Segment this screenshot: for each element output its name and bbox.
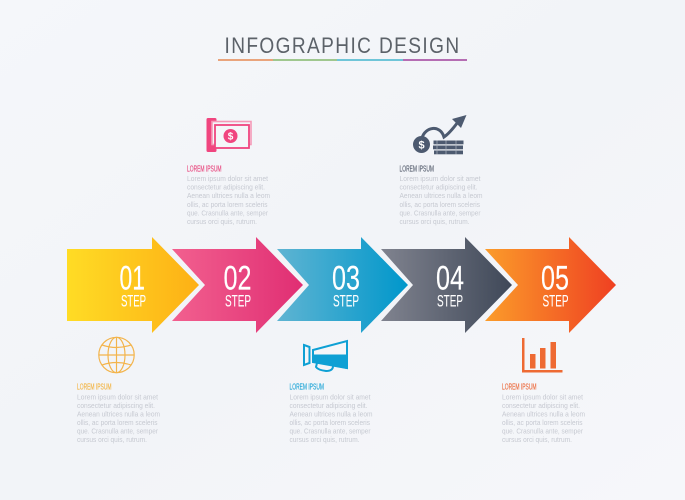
text block: step 04: que. Crasnulla ante, semper	[400, 208, 481, 217]
arrow step 05: STEP	[542, 292, 568, 310]
arrow step 04	[381, 237, 512, 333]
icon: coin with rising arrow and stacks	[413, 115, 466, 154]
text block: step 01: ollis, ac porta lorem sceleris	[77, 418, 158, 427]
text block: step 02: cursus orci quis, rutrum.	[187, 217, 257, 226]
text block: step 05: Aenean ultrices nulla a leom	[502, 410, 585, 418]
icon: banknotes	[206, 118, 251, 152]
text block: step 04: LOREM IPSUM	[400, 164, 434, 174]
text block: step 05: que. Crasnulla ante, semper	[502, 426, 583, 436]
text block: step 01: consectetur adipiscing elit.	[77, 401, 155, 410]
text block: step 05	[502, 382, 585, 444]
arrow step 02: 02	[224, 260, 252, 298]
icon: bar chart	[522, 338, 562, 372]
text block: step 03: Lorem ipsum dolor sit amet	[290, 392, 371, 402]
text block: step 04: ollis, ac porta lorem sceleris	[400, 200, 480, 209]
text block: step 01: que. Crasnulla ante, semper	[77, 426, 158, 436]
text block: step 02: ollis, ac porta lorem sceleris	[187, 200, 268, 209]
text block: step 01: Aenean ultrices nulla a leom	[77, 410, 160, 418]
arrow step 01: STEP	[121, 292, 146, 310]
arrow step 04: STEP	[437, 292, 463, 310]
text block: step 04	[400, 164, 482, 226]
text block: step 03: consectetur adipiscing elit.	[290, 401, 368, 410]
text block: step 03	[290, 382, 372, 444]
arrow step 03: STEP	[333, 292, 359, 310]
text block: step 03: cursus orci quis, rutrum.	[290, 435, 360, 444]
arrow step 04: 04	[436, 260, 464, 298]
text block: step 04: cursus orci quis, rutrum.	[400, 217, 470, 226]
text block: step 04: Lorem ipsum dolor sit amet	[400, 174, 481, 183]
text block: step 04: Aenean ultrices nulla a leom	[400, 191, 482, 200]
text block: step 01: cursus orci quis, rutrum.	[77, 435, 147, 444]
arrow step 01	[67, 237, 199, 333]
text block: step 04: consectetur adipiscing elit.	[400, 183, 478, 192]
text block: step 02	[187, 164, 270, 226]
text block: step 01: Lorem ipsum dolor sit amet	[77, 392, 159, 402]
icon: megaphone	[304, 341, 347, 371]
text block: step 03: ollis, ac porta lorem sceleris	[290, 418, 370, 427]
text block: step 02: que. Crasnulla ante, semper	[187, 208, 268, 217]
text block: step 03: que. Crasnulla ante, semper	[290, 426, 371, 436]
arrow step 02	[172, 237, 303, 333]
icon: banknotes: $	[228, 132, 234, 142]
arrow step 01: 01	[120, 260, 145, 298]
text block: step 05: consectetur adipiscing elit.	[502, 401, 580, 410]
text block: step 05: cursus orci quis, rutrum.	[502, 435, 572, 444]
text block: step 02: consectetur adipiscing elit.	[187, 183, 265, 192]
icon: coin with rising arrow and stacks: $	[418, 140, 425, 152]
arrow step 02: STEP	[225, 292, 251, 310]
text block: step 01: LOREM IPSUM	[77, 382, 112, 392]
text block: step 05: Lorem ipsum dolor sit amet	[502, 392, 584, 402]
arrow step 03: 03	[332, 260, 360, 298]
text block: step 03: LOREM IPSUM	[290, 382, 324, 392]
text block: step 02: Lorem ipsum dolor sit amet	[187, 174, 269, 183]
arrow step 05: 05	[541, 260, 569, 298]
text block: step 01	[77, 382, 160, 444]
text block: step 03: Aenean ultrices nulla a leom	[290, 410, 372, 418]
text block: step 05: LOREM IPSUM	[502, 382, 537, 392]
text block: step 02: Aenean ultrices nulla a leom	[187, 191, 270, 200]
title: INFOGRAPHIC DESIGN	[224, 33, 460, 58]
arrow step 03	[277, 237, 408, 333]
arrow step 05	[485, 237, 616, 333]
text block: step 05: ollis, ac porta lorem sceleris	[502, 418, 583, 427]
text block: step 02: LOREM IPSUM	[187, 164, 222, 174]
icon: globe	[99, 337, 134, 373]
